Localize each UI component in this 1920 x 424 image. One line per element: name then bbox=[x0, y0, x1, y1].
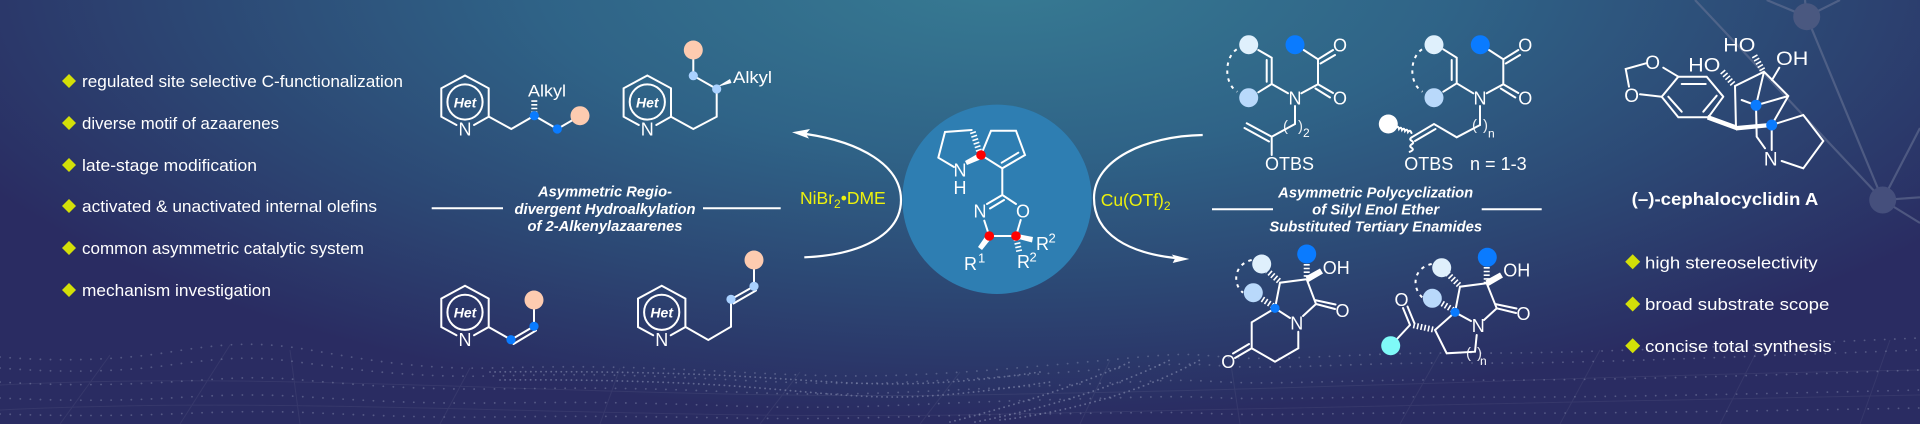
molecule: polycyclization product D: O bbox=[1516, 304, 1531, 324]
network decoration top right bbox=[1695, 0, 1920, 223]
molecule: vinyl azaarene substrate, bottom left bbox=[441, 286, 544, 350]
molecule: homoallyl azaarene substrate, bottom middle: Het bbox=[650, 305, 674, 321]
molecule: vinyl azaarene substrate, bottom left: Het bbox=[454, 305, 478, 321]
molecule: chiral ligand: 2 bbox=[1048, 230, 1056, 246]
molecule: homoallyl azaarene substrate, bottom middle bbox=[638, 250, 764, 350]
catalyst label: NiBr2 DME: NiBr bbox=[800, 188, 834, 208]
molecule: enamide substrate A: N bbox=[1288, 88, 1302, 108]
molecule: chiral ligand bbox=[938, 130, 1056, 274]
molecule: cephalocyclidin A: HO bbox=[1688, 56, 1720, 77]
molecule: polycyclization product C: N bbox=[1290, 314, 1303, 334]
molecule: cephalocyclidin A bbox=[1624, 36, 1823, 171]
molecule: polycyclization product D: n bbox=[1480, 354, 1487, 368]
molecule: enamide substrate B: O bbox=[1518, 88, 1532, 108]
molecule: enamide substrate B: ( bbox=[1472, 117, 1477, 134]
molecule: enamide substrate A: O bbox=[1333, 88, 1347, 108]
bullet: late-stage modification: late-stage modification bbox=[82, 156, 257, 175]
left reaction title: Asymmetric Regio- bbox=[537, 185, 672, 201]
molecule: enamide substrate B: n = 1-3 bbox=[1470, 154, 1527, 174]
bullet: diverse motif of azaarenes: diverse motif of azaarenes bbox=[82, 114, 279, 133]
molecule: branched hydroalkylation product, top left bbox=[441, 76, 590, 140]
molecule: branched hydroalkylation product, top left: Het bbox=[454, 94, 478, 110]
right reaction title: Asymmetric Polycyclization bbox=[1277, 185, 1473, 201]
arrow: copper branch to the right bbox=[1094, 135, 1203, 263]
right reaction title bbox=[1212, 185, 1542, 236]
molecule: homoallyl azaarene substrate, bottom middle: N bbox=[655, 330, 668, 350]
molecule: enamide substrate A: 2 bbox=[1303, 126, 1310, 140]
molecule: enamide substrate A: O bbox=[1333, 36, 1347, 56]
molecule: chiral ligand: R bbox=[964, 254, 977, 274]
molecule: cephalocyclidin A: O bbox=[1645, 53, 1660, 74]
molecule: chiral ligand: N bbox=[974, 202, 986, 222]
molecule: chiral ligand: R bbox=[1017, 252, 1030, 272]
molecule: polycyclization product D bbox=[1381, 248, 1531, 368]
molecule: enamide substrate A: ) bbox=[1298, 118, 1303, 135]
left reaction title bbox=[432, 185, 781, 235]
catalyst label: Cu(OTf)2: Cu(OTf) bbox=[1101, 190, 1164, 210]
molecule: polycyclization product D: O bbox=[1394, 290, 1409, 310]
natural product name: (–)-cephalocyclidin A bbox=[1632, 189, 1819, 209]
arrow: nickel branch to the left bbox=[792, 129, 901, 257]
molecule: enamide substrate A bbox=[1227, 35, 1347, 174]
bullet: broad substrate scope: broad substrate scope bbox=[1645, 295, 1829, 314]
bullet: high stereoselectivity: high stereoselectivity bbox=[1645, 253, 1818, 272]
molecule: enamide substrate B: ) bbox=[1483, 117, 1488, 134]
molecule: cephalocyclidin A: O bbox=[1624, 86, 1639, 107]
molecule: enamide substrate B bbox=[1379, 35, 1532, 174]
central ligand circle bbox=[902, 105, 1092, 294]
molecule: chiral ligand: R bbox=[1036, 234, 1049, 254]
molecule: polycyclization product D: ) bbox=[1477, 345, 1482, 362]
bullet: activated and unactivated internal olefins: activated & unactivated internal olefins bbox=[82, 197, 377, 216]
bullet: common asymmetric catalytic system: common asymmetric catalytic system bbox=[82, 239, 364, 258]
molecule: branched hydroalkylation product, top left: N bbox=[458, 120, 472, 140]
right reaction title: of Silyl Enol Ether bbox=[1312, 203, 1441, 219]
catalyst label: NiBr2 DME: •DME bbox=[841, 188, 886, 208]
molecule: enamide substrate A: ( bbox=[1283, 118, 1288, 135]
molecule: vinyl azaarene substrate, bottom left: N bbox=[458, 330, 472, 350]
right reaction title: Substituted Tertiary Enamides bbox=[1269, 220, 1482, 236]
bullet: mechanism investigation: mechanism investigation bbox=[82, 281, 271, 300]
molecule: linear hydroalkylation product, top middle: N bbox=[641, 120, 654, 140]
molecule: chiral ligand: 2 bbox=[1030, 250, 1037, 264]
molecule: enamide substrate B: N bbox=[1474, 88, 1486, 108]
molecule: polycyclization product D: N bbox=[1472, 316, 1485, 336]
molecule: cephalocyclidin A: OH bbox=[1776, 49, 1808, 70]
molecule: linear hydroalkylation product, top middle: Het bbox=[636, 94, 660, 110]
right feature list bbox=[1625, 253, 1832, 356]
molecule: enamide substrate B: O bbox=[1518, 36, 1532, 56]
molecule: branched hydroalkylation product, top left: Alkyl bbox=[528, 82, 566, 101]
left reaction title: divergent Hydroalkylation bbox=[514, 202, 696, 218]
dotted wave mesh background bbox=[0, 338, 1920, 424]
molecule: polycyclization product C: O bbox=[1221, 352, 1235, 372]
molecule: chiral ligand: N bbox=[954, 161, 966, 181]
molecule: polycyclization product C bbox=[1221, 244, 1350, 372]
catalyst label: Cu(OTf)2: 2 bbox=[1164, 199, 1171, 213]
left feature list bbox=[62, 72, 403, 300]
molecule: polycyclization product D: OH bbox=[1503, 261, 1530, 281]
molecule: linear hydroalkylation product, top middle bbox=[624, 40, 772, 140]
bullet: concise total synthesis: concise total synthesis bbox=[1645, 337, 1832, 356]
left reaction title: of 2-Alkenylazaarenes bbox=[528, 219, 682, 235]
molecule: polycyclization product C: O bbox=[1335, 301, 1350, 321]
molecule: enamide substrate B: n bbox=[1488, 126, 1495, 140]
molecule: polycyclization product D: ( bbox=[1466, 345, 1471, 362]
molecule: chiral ligand: O bbox=[1016, 202, 1030, 222]
bullet: regulated site selective C-functionalization: regulated site selective C-functionalization bbox=[82, 72, 403, 91]
molecule: enamide substrate A: OTBS bbox=[1265, 154, 1314, 174]
molecule: linear hydroalkylation product, top middle: Alkyl bbox=[733, 68, 772, 87]
molecule: cephalocyclidin A: N bbox=[1764, 150, 1778, 170]
molecule: polycyclization product C: OH bbox=[1323, 258, 1350, 278]
molecule: enamide substrate B: OTBS bbox=[1404, 154, 1453, 174]
catalyst label: NiBr2 DME: 2 bbox=[834, 197, 841, 211]
molecule: chiral ligand: 1 bbox=[978, 250, 985, 266]
molecule: cephalocyclidin A: HO bbox=[1723, 36, 1755, 57]
molecule: chiral ligand: H bbox=[954, 178, 966, 198]
